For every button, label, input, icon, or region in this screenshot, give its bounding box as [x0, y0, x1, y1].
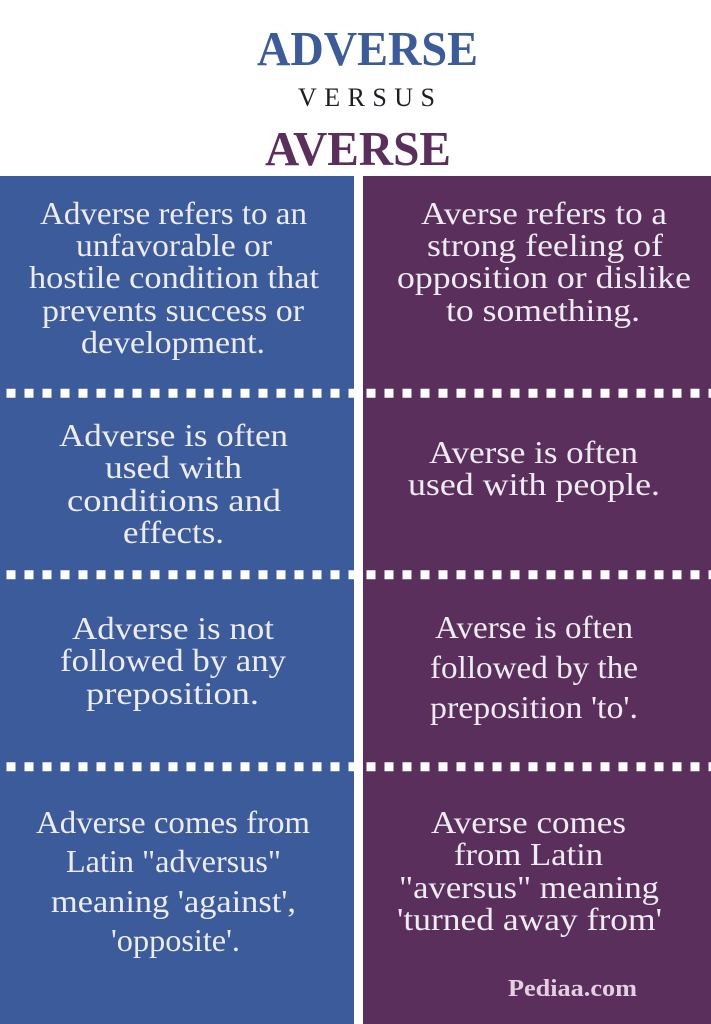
dotted dividers [6, 393, 711, 767]
text: adverse origin: meaning 'against', [51, 883, 296, 919]
text: averse definition: strong feeling of [427, 227, 663, 263]
title: Averse: AVERSE [265, 121, 451, 176]
subtitle: versus: VERSUS [298, 83, 435, 112]
text: adverse preposition: followed by any [60, 642, 286, 678]
text: averse preposition [430, 609, 638, 725]
text: adverse usage: Adverse is often [59, 417, 288, 453]
text: averse preposition: followed by the [430, 649, 638, 685]
text: averse usage: Averse is often [429, 434, 638, 470]
logo: Pediaa.com: Pediaa.com [508, 976, 637, 1002]
text: averse preposition: preposition 'to'. [430, 689, 638, 725]
text: averse origin [397, 804, 662, 937]
text: averse origin: Averse comes [431, 804, 626, 840]
text: averse definition: opposition or dislike [397, 259, 691, 295]
text: averse definition: Averse refers to a [421, 195, 667, 231]
text: averse origin: "aversus" meaning [399, 869, 659, 905]
text: averse usage: used with people. [408, 466, 660, 502]
panel: averse column [363, 176, 711, 1024]
text: averse origin: 'turned away from' [397, 901, 662, 937]
text: adverse definition: hostile condition that [29, 259, 319, 295]
text: averse definition [397, 195, 691, 328]
text: adverse definition: development. [81, 324, 265, 360]
text: adverse definition: prevents success or [42, 292, 304, 328]
text: adverse definition [29, 195, 319, 360]
text: adverse usage: conditions and [67, 482, 281, 518]
text: adverse origin [36, 804, 310, 958]
text: adverse origin: Latin "adversus" [66, 843, 281, 879]
text: averse definition: to something. [446, 292, 640, 328]
text: adverse usage: effects. [123, 514, 224, 550]
text: adverse definition: Adverse refers to an [40, 195, 307, 231]
text: adverse preposition: preposition. [86, 675, 259, 711]
title: Adverse: ADVERSE [257, 21, 478, 76]
text: adverse preposition [60, 610, 286, 711]
text: adverse origin: 'opposite'. [111, 922, 240, 958]
text: averse origin: from Latin [454, 836, 603, 872]
panel: adverse column [0, 176, 354, 1024]
text: averse usage [408, 434, 660, 502]
text: adverse definition: unfavorable or [76, 227, 272, 263]
text: adverse usage [59, 417, 288, 550]
text: adverse usage: used with [105, 449, 242, 485]
text: averse preposition: Averse is often [435, 609, 633, 645]
text: adverse preposition: Adverse is not [72, 610, 274, 646]
text: adverse origin: Adverse comes from [36, 804, 310, 840]
